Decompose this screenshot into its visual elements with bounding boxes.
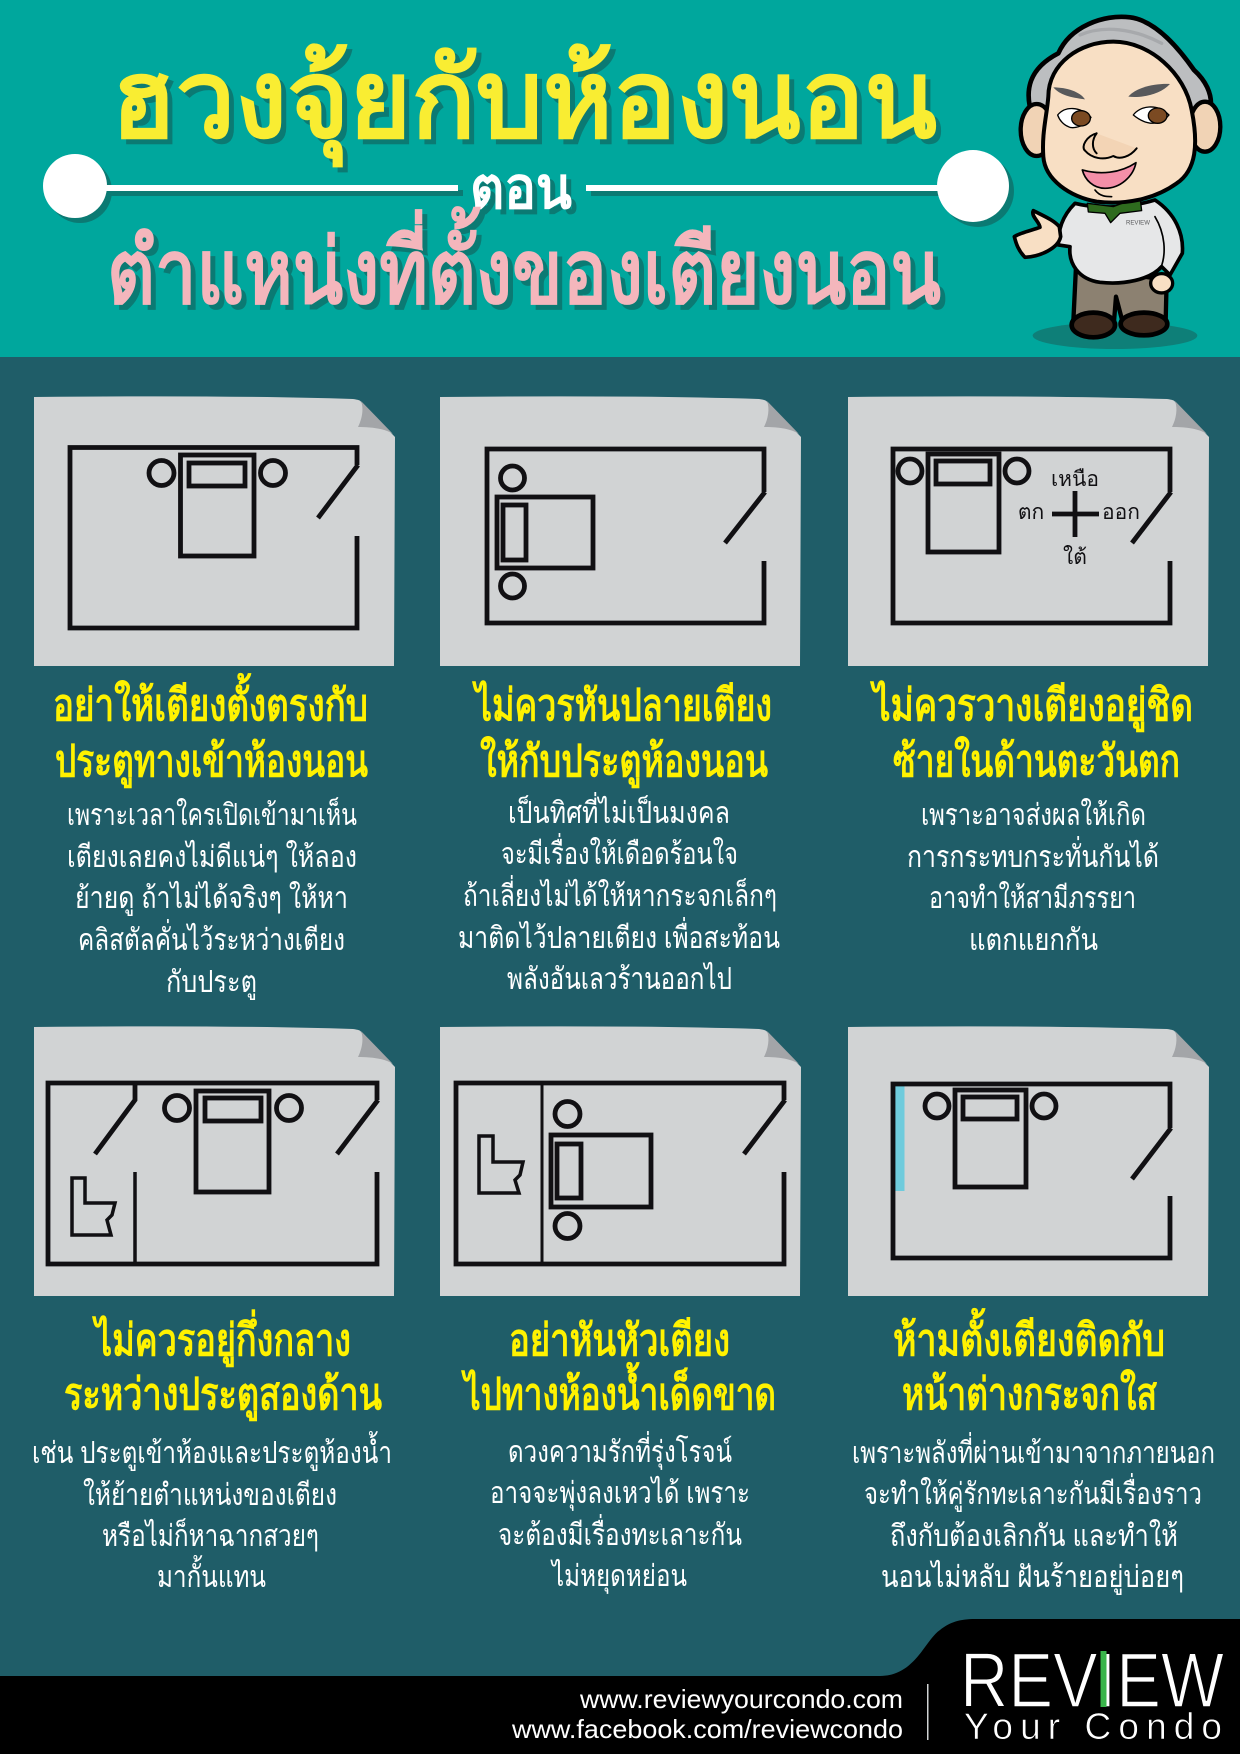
heading 6 — [893, 1307, 1165, 1419]
heading 5: อย่าหันหัวเตียง — [509, 1316, 730, 1365]
compass labels — [1018, 468, 1140, 569]
paper fold — [764, 1031, 799, 1064]
divider with circles — [43, 150, 1009, 222]
heading 6: หน้าต่างกระจกใส — [902, 1368, 1157, 1419]
heading 2 — [472, 679, 772, 788]
paper fold — [358, 1031, 393, 1064]
body text 3: อาจทำให้สามีภรรยา — [929, 881, 1136, 915]
ground shadow — [1033, 322, 1197, 349]
heading 1 — [53, 672, 368, 788]
heading 6: ห้ามตั้งเตียงติดกับ — [893, 1307, 1165, 1365]
footer links — [511, 1684, 903, 1744]
paper fold — [1172, 1031, 1207, 1064]
title line 1: ฮวงจุ้ยกับห้องนอน — [111, 38, 937, 168]
body text 5: อาจจะพุ่งลงเหวได้ เพราะ — [490, 1475, 750, 1512]
eyes — [1058, 107, 1169, 128]
mouth — [1082, 163, 1136, 188]
body text 3 — [907, 798, 1159, 957]
body text 1: กับประตู — [166, 966, 257, 1000]
title word: ตอน — [470, 156, 572, 221]
body text 4: หรือไม่ก็หาฉากสวยๆ — [102, 1517, 319, 1553]
heading 1: อย่าให้เตียงตั้งตรงกับ — [53, 672, 368, 730]
panel 1 — [34, 396, 395, 666]
paper sheet — [440, 396, 801, 666]
paper fold — [1172, 401, 1207, 434]
panel 6 — [848, 1026, 1209, 1296]
panel 4 — [34, 1026, 395, 1296]
floor plan 5 — [456, 1083, 785, 1264]
body text 1 — [67, 796, 357, 1000]
hair — [1029, 17, 1211, 118]
paper sheet — [440, 1026, 801, 1296]
compass labels: เหนือ — [1051, 468, 1099, 491]
body text 3: แตกแยกกัน — [969, 924, 1098, 957]
body text 4: ให้ย้ายตำแหน่งของเตียง — [83, 1478, 337, 1512]
body text 5: จะต้องมีเรื่องทะเลาะกัน — [498, 1514, 742, 1552]
floor plan 2 — [487, 449, 765, 623]
chin line — [1095, 190, 1112, 197]
heading 2: ไม่ควรหันปลายเตียง — [472, 679, 772, 730]
footer divider — [927, 1684, 928, 1740]
compass labels: ออก — [1102, 501, 1140, 524]
floor plan 6 — [893, 1084, 1171, 1258]
sleeve fold — [1155, 217, 1164, 268]
compass labels: ใต้ — [1063, 545, 1087, 569]
body text 1: เตียงเลยคงไม่ดีแน่ๆ ให้ลอง — [67, 839, 357, 874]
left hand — [1014, 211, 1061, 257]
floor plan 3 — [893, 449, 1171, 623]
floor plan 1 — [70, 448, 358, 628]
nose — [1084, 133, 1137, 158]
body text 4 — [32, 1431, 392, 1594]
header band — [0, 0, 1240, 357]
face — [1043, 42, 1195, 203]
footer links: www.facebook.com/reviewcondo — [511, 1714, 903, 1744]
logo: Your Condo — [964, 1706, 1222, 1747]
shirt logo: REVIEW — [1126, 220, 1151, 227]
heading 4 — [64, 1309, 382, 1421]
paper sheet — [34, 1026, 395, 1296]
paper fold — [764, 401, 799, 434]
footer band — [0, 1619, 1240, 1754]
footer links: www.reviewyourcondo.com — [579, 1684, 903, 1714]
heading 1: ประตูทางเข้าห้องนอน — [55, 737, 368, 788]
right hand — [1151, 274, 1173, 293]
heading 4: ไม่ควรอยู่กึ่งกลาง — [92, 1309, 351, 1367]
body text 1: คลิสตัลคั่นไว้ระหว่างเตียง — [78, 919, 345, 957]
compass labels: ตก — [1018, 501, 1044, 524]
body text 1: ย้ายดู ถ้าไม่ได้จริงๆ ให้หา — [75, 880, 348, 916]
body text 3: การกระทบกระทั่นกันได้ — [907, 836, 1159, 874]
body text 6 — [852, 1432, 1215, 1595]
shirt — [1058, 200, 1183, 283]
paper sheet — [848, 396, 1209, 666]
logo accent — [1100, 1651, 1106, 1707]
heading 2: ให้กับประตูห้องนอน — [480, 735, 768, 788]
collar — [1087, 197, 1142, 223]
heading 3 — [870, 679, 1193, 786]
body text 2: พลังอันเลวร้านออกไป — [507, 961, 732, 996]
eyebrows — [1053, 84, 1170, 99]
body text 2: เป็นทิศที่ไม่เป็นมงคล — [508, 792, 730, 830]
body text 2: ถ้าเลี่ยงไม่ได้ให้หากระจกเล็กๆ — [463, 875, 777, 913]
panel 2 — [440, 396, 801, 666]
body text 6: ถึงกับต้องเลิกกัน และทำให้ — [890, 1519, 1178, 1553]
ears — [1021, 102, 1220, 156]
panel 3 — [848, 396, 1209, 666]
body text 5 — [490, 1431, 750, 1595]
body text 2: จะมีเรื่องให้เดือดร้อนใจ — [501, 833, 738, 871]
floor plan 4 — [48, 1083, 378, 1264]
body text 2 — [458, 792, 780, 996]
hair streak — [1080, 29, 1162, 43]
paper fold — [358, 401, 393, 434]
compass cross — [1052, 491, 1099, 537]
body text 3: เพราะอาจส่งผลให้เกิด — [921, 798, 1146, 832]
paper sheet — [848, 1026, 1209, 1296]
toilet — [479, 1136, 523, 1193]
heading 5: ไปทางห้องน้ำเด็ดขาด — [461, 1361, 776, 1419]
body text 2: มาติดไว้ปลายเตียง เพื่อสะท้อน — [458, 917, 780, 955]
panel 5 — [440, 1026, 801, 1296]
body text 1: เพราะเวลาใครเปิดเข้ามาเห็น — [67, 796, 357, 832]
title block — [43, 38, 1009, 323]
trousers — [1073, 267, 1167, 322]
mascot character — [1014, 17, 1220, 349]
toilet — [72, 1178, 115, 1235]
body text 6: นอนไม่หลับ ฝันร้ายอยู่บ่อยๆ — [881, 1559, 1184, 1595]
body text 4: เช่น ประตูเข้าห้องและประตูห้องน้ำ — [32, 1431, 392, 1471]
shoes — [1072, 313, 1167, 337]
main background — [0, 357, 1240, 1754]
heading 5 — [461, 1316, 776, 1419]
window — [895, 1086, 904, 1191]
paper sheet — [34, 396, 395, 666]
heading 4: ระหว่างประตูสองด้าน — [64, 1370, 382, 1421]
body text 5: ดวงความรักที่รุ่งโรจน์ — [508, 1431, 732, 1471]
body text 5: ไม่หยุดหย่อน — [550, 1558, 687, 1595]
title line 2: ตำแหน่งที่ตั้งของเตียงนอน — [107, 206, 941, 323]
body text 4: มากั้นแทน — [157, 1555, 266, 1594]
